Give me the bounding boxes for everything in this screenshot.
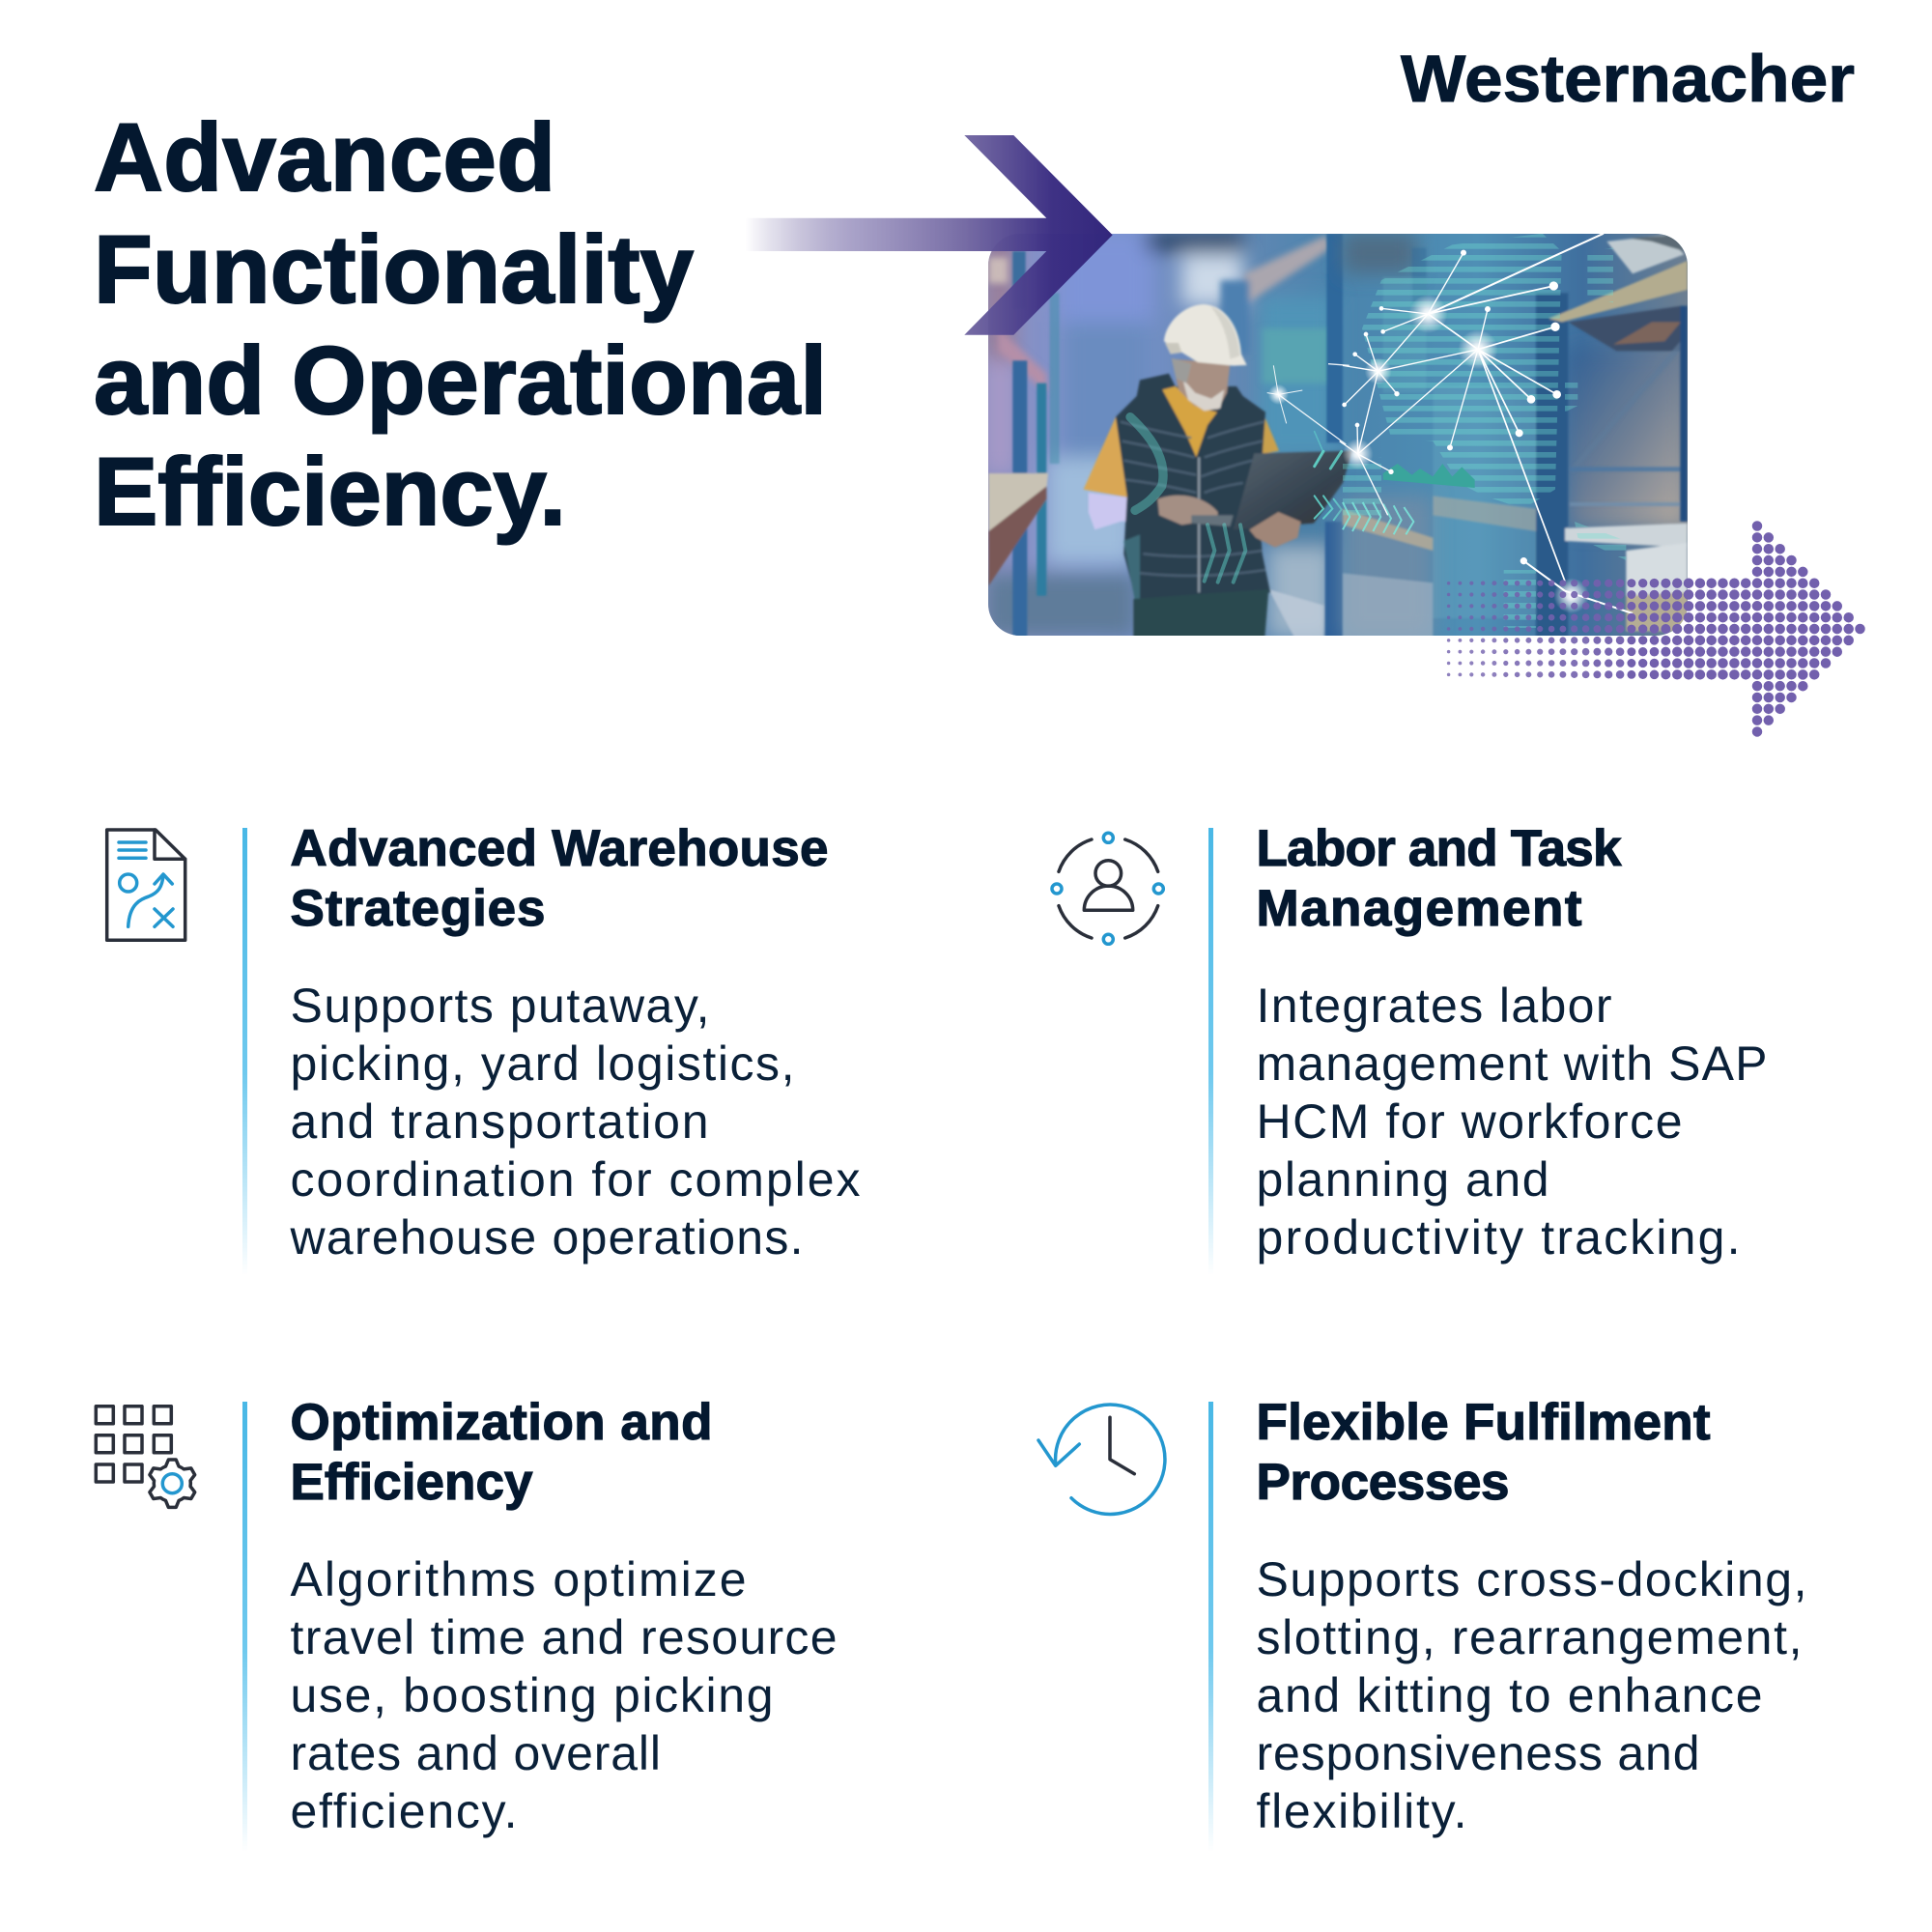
body text: productivity tracking.: [1256, 1210, 1741, 1264]
left network node: [1267, 364, 1350, 444]
heading: Strategies: [290, 880, 545, 937]
body text: Supports putaway,: [290, 979, 709, 1033]
body text: and transportation: [290, 1094, 709, 1149]
body text: travel time and resource: [290, 1610, 837, 1664]
body text: [1256, 1552, 1806, 1838]
panel: Optimization and Efficiency: [96, 1394, 838, 1852]
divider bar: [1208, 1402, 1213, 1852]
title: Advanced: [94, 104, 555, 212]
divider bar: [242, 1402, 247, 1852]
title: and Operational: [94, 327, 827, 435]
body text: use, boosting picking: [290, 1668, 773, 1722]
heading: Labor and Task: [1256, 820, 1622, 877]
body text: management with SAP: [1256, 1037, 1768, 1091]
heading: [290, 1394, 713, 1511]
body text: [290, 1552, 837, 1838]
body text: responsiveness and: [1256, 1726, 1700, 1780]
body text: picking, yard logistics,: [290, 1037, 794, 1091]
divider bar: [242, 828, 247, 1275]
panel: Labor and Task Management: [1052, 820, 1768, 1275]
heading: Processes: [1256, 1454, 1509, 1511]
arrow: gradient purple arrow: [745, 135, 1113, 335]
title: Functionality: [94, 216, 694, 324]
body text: Supports cross-docking,: [1256, 1552, 1806, 1606]
body text: Integrates labor: [1256, 979, 1611, 1033]
heading: Efficiency: [290, 1454, 533, 1511]
body text: rates and overall: [290, 1726, 661, 1780]
panel: Flexible Fulfilment Processes: [1038, 1394, 1806, 1852]
icon: clock with counterclockwise arrow: [1038, 1405, 1165, 1514]
network lines and nodes: [1340, 234, 1633, 613]
body text: and kitting to enhance: [1256, 1668, 1762, 1722]
heading: Advanced Warehouse: [290, 820, 829, 877]
title: Efficiency.: [94, 439, 566, 546]
title: [94, 104, 827, 546]
heading: [1256, 1394, 1710, 1511]
divider bar: [1208, 828, 1213, 1275]
body text: slotting, rearrangement,: [1256, 1610, 1803, 1664]
body text: [1256, 979, 1768, 1264]
body text: HCM for workforce: [1256, 1094, 1683, 1149]
chevron row: [1343, 502, 1413, 534]
body text: coordination for complex: [290, 1152, 860, 1207]
body text: planning and: [1256, 1152, 1549, 1207]
worker: [1084, 304, 1352, 638]
logo: Westernacher: Westernacher: [1401, 42, 1855, 116]
teal data stripes: [1343, 234, 1626, 628]
body text: Algorithms optimize: [290, 1552, 746, 1606]
heading: [290, 820, 829, 937]
heading: Management: [1256, 880, 1582, 937]
panel: Advanced Warehouse Strategies: [107, 820, 860, 1275]
body text: flexibility.: [1256, 1784, 1466, 1838]
icon: document with play diagram: [107, 830, 185, 940]
heading: [1256, 820, 1622, 937]
teal area chart: [1383, 464, 1475, 488]
body text: [290, 979, 860, 1264]
icon: person in circle: [1052, 833, 1163, 944]
icon: grid with gear: [96, 1406, 195, 1507]
photo: warehouse worker with laptop and network overlay: [985, 232, 1688, 638]
heading: Optimization and: [290, 1394, 713, 1451]
teal light streaks: [1130, 417, 1342, 582]
heading: Flexible Fulfilment: [1256, 1394, 1710, 1451]
body text: warehouse operations.: [290, 1210, 804, 1264]
arrow: dotted purple arrow: [1449, 526, 1861, 732]
body text: efficiency.: [290, 1784, 518, 1838]
